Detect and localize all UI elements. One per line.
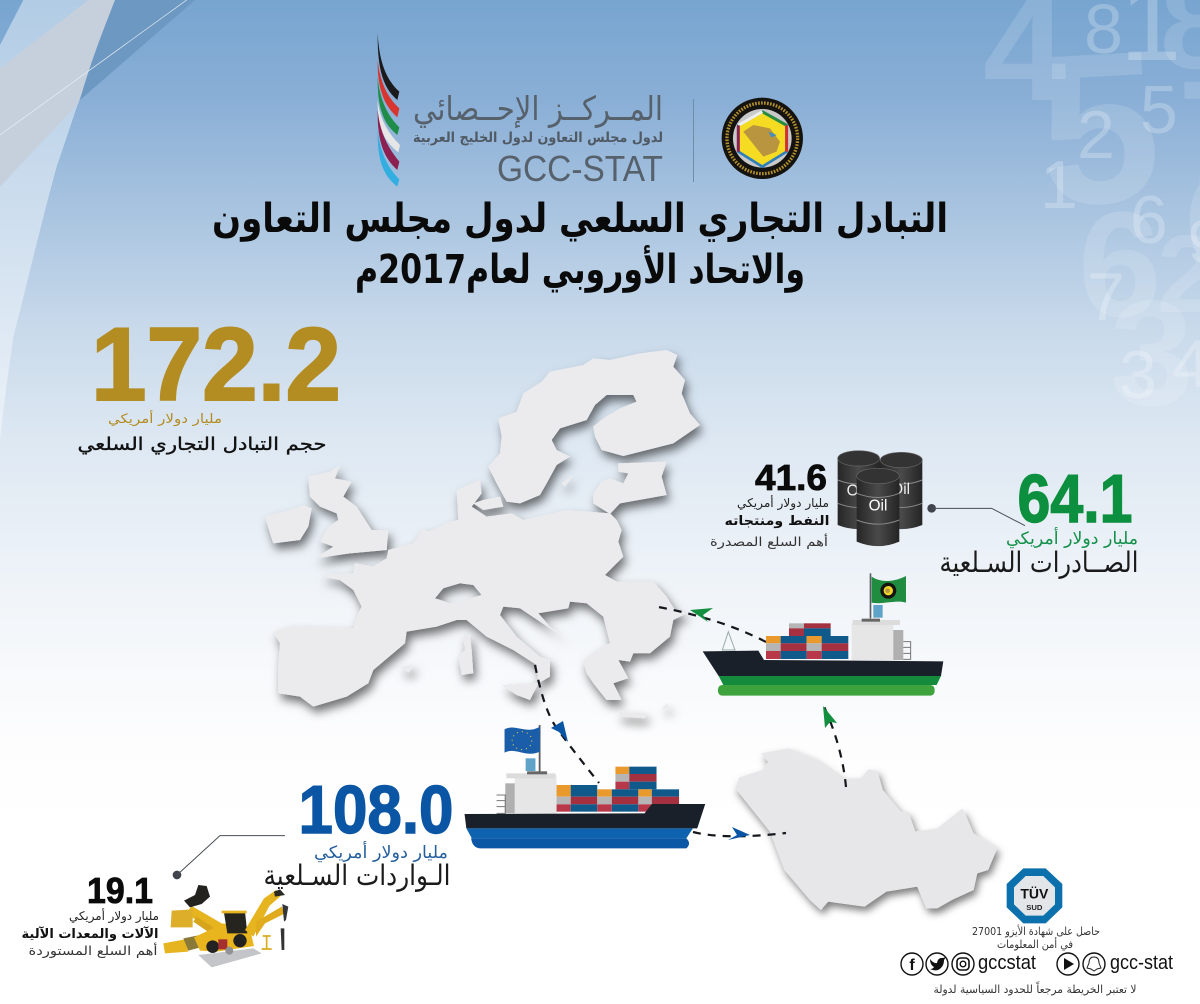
background numbers: 5 [1034,5,1166,251]
oil name: النفط ومنتجاته [724,514,830,529]
Great Britain [308,465,388,558]
connector line [927,504,1025,526]
body [194,923,254,952]
icon: oil barrels [838,451,922,546]
icon: youtube [1057,953,1079,975]
drill tools [281,928,284,950]
social media row [901,952,1173,975]
certificate line 2: في أمن المعلومات [997,937,1073,951]
hull [703,651,943,676]
loader arms [186,906,227,937]
front attachment [171,909,193,927]
wheels [233,934,247,947]
handle: gcc-stat: gcc-stat [1110,952,1173,974]
handle: gccstat: gccstat [978,952,1036,974]
oil label: أهم السلع المصدرة [710,533,828,550]
badge: TÜV SÜD [1007,868,1062,923]
oil unit: مليار دولار أمريكي [737,495,829,511]
logo subheading: لدول مجلس التعاون لدول الخليج العربية [413,130,663,146]
icon: snapchat [1083,953,1105,975]
arrow line: Arabia to green ship [822,702,846,787]
ground plate [198,948,262,967]
cab [224,912,247,933]
icon: instagram [952,953,974,975]
background numbers: 7 [1087,259,1125,335]
stat: exports [927,461,1138,579]
background numbers: 3 [1110,269,1193,437]
arrow line: Europe to blue ship [535,665,599,783]
backhoe arm [245,890,281,937]
containers [766,623,848,659]
icon: ribbon [378,33,400,187]
superstructure [497,725,557,814]
badge: TÜV SÜD: TÜV [1020,885,1049,901]
arrow line: green ship to Europe [653,606,766,642]
black bucket [184,885,210,907]
arrow line: blue ship to Arabia [693,832,786,836]
icon: twitter [926,953,948,975]
map: Arabian Peninsula [735,748,997,910]
stat: total trade [78,307,341,455]
background numbers: 6 [1130,182,1168,258]
Scandinavia [488,350,700,503]
title line 1: التبادل التجاري السلعي لدول مجلس التعاون [212,196,948,242]
Baltic states [593,462,667,514]
icon: facebook [901,953,923,975]
certificate text [972,924,1100,951]
icon: construction machinery [163,885,288,967]
barrel right: Oil [891,481,910,498]
logo heading: المــركــز الإحــصائي [413,89,663,128]
background numbers: 5 [1140,72,1178,148]
exports label: الصــادرات السـلعية [940,546,1138,579]
dashed arrows [535,606,846,836]
machinery unit: مليار دولار أمريكي [69,908,159,924]
logo latin name: GCC-STAT [497,148,663,189]
machinery label: أهم السلع المستوردة [28,942,158,959]
icon: GCC emblem [722,98,803,179]
hull [465,804,705,828]
connector line [173,836,285,879]
title [212,196,948,293]
green ship [703,573,943,696]
background numbers: 2 [1077,97,1115,173]
imports label: الـواردات السـلعية [264,859,450,892]
total value: 172.2 [91,307,341,423]
background numbers: 3 [1119,337,1157,413]
bow mast [722,632,735,650]
logo: GCC-STAT [378,33,803,189]
Gotland [562,475,573,487]
total unit: مليار دولار أمريكي [108,410,222,427]
Ireland [265,505,312,543]
title line 2: والاتحاد الأوروبي لعام2017م [355,244,805,293]
stat: top export [710,457,830,550]
arrowhead: to green ship [823,706,837,728]
arrowhead: to Arabia [728,827,750,840]
flag: EU [505,727,540,754]
exports value: 64.1 [1018,461,1132,537]
arrowhead: to blue ship [551,721,568,742]
mainland Europe [273,480,687,707]
barrel front: Oil [869,498,887,515]
map disclaimer: لا تعتبر الخريطة مرجعاً للحدود السياسية لدولة [934,981,1136,996]
Crete and small islands [400,665,670,718]
oil value: 41.6 [755,457,827,498]
machinery name: الآلات والمعدات الآلية [22,926,158,942]
certificate line 1: حاصل على شهادة الأيزو 27001 [972,924,1100,938]
imports unit: مليار دولار أمريكي [314,841,448,863]
stat: imports [173,772,454,892]
barrel left: Oil [847,482,865,499]
map: Europe [265,350,700,718]
background swoosh [0,0,195,440]
badge: TÜV SÜD: SUD [1026,903,1043,912]
blue ship [465,725,705,848]
superstructure [852,573,911,660]
flag: GCC [872,576,906,603]
icon: facebook: f [909,957,915,974]
Sicily [502,683,538,700]
total label: حجم التبادل التجاري السلعي [78,434,326,455]
background numbers [983,0,1200,437]
imports value: 108.0 [298,772,454,848]
stat: top import [22,870,159,959]
background numbers: 6 [1078,180,1161,348]
containers [557,767,679,812]
exports unit: مليار دولار أمريكي [1006,527,1138,549]
Corsica and Sardinia [458,635,473,675]
background numbers: 1 [1040,147,1078,223]
Danish islands [473,497,503,510]
arrowhead: to Europe [690,608,713,622]
machinery value: 19.1 [87,870,153,911]
